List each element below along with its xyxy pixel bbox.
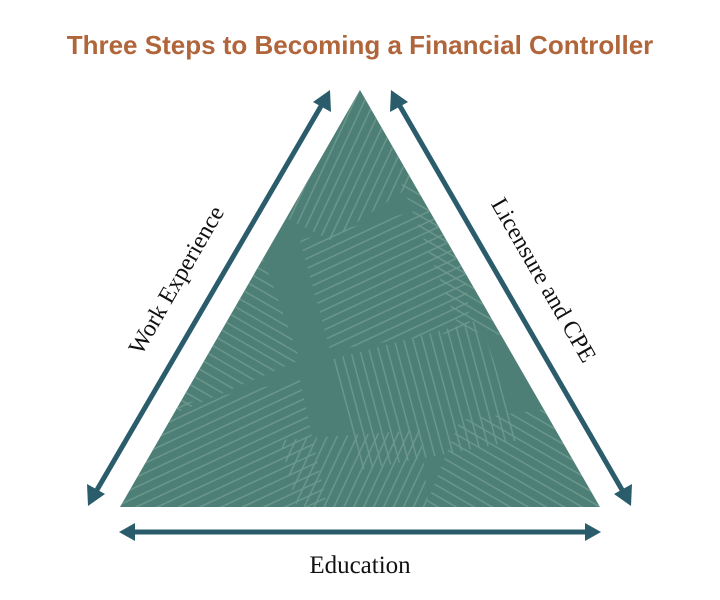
label: education: Education xyxy=(309,552,411,579)
arrow: education xyxy=(119,523,601,541)
title: Three Steps to Becoming a Financial Controller xyxy=(67,30,653,60)
label: licensure and CPE: Licensure and CPE xyxy=(485,194,601,367)
arrow: licensure xyxy=(390,90,632,506)
arrow: work experience xyxy=(87,90,331,506)
triangle xyxy=(120,90,600,507)
label: work experience: Work Experience xyxy=(124,202,230,359)
infographic xyxy=(67,35,653,574)
